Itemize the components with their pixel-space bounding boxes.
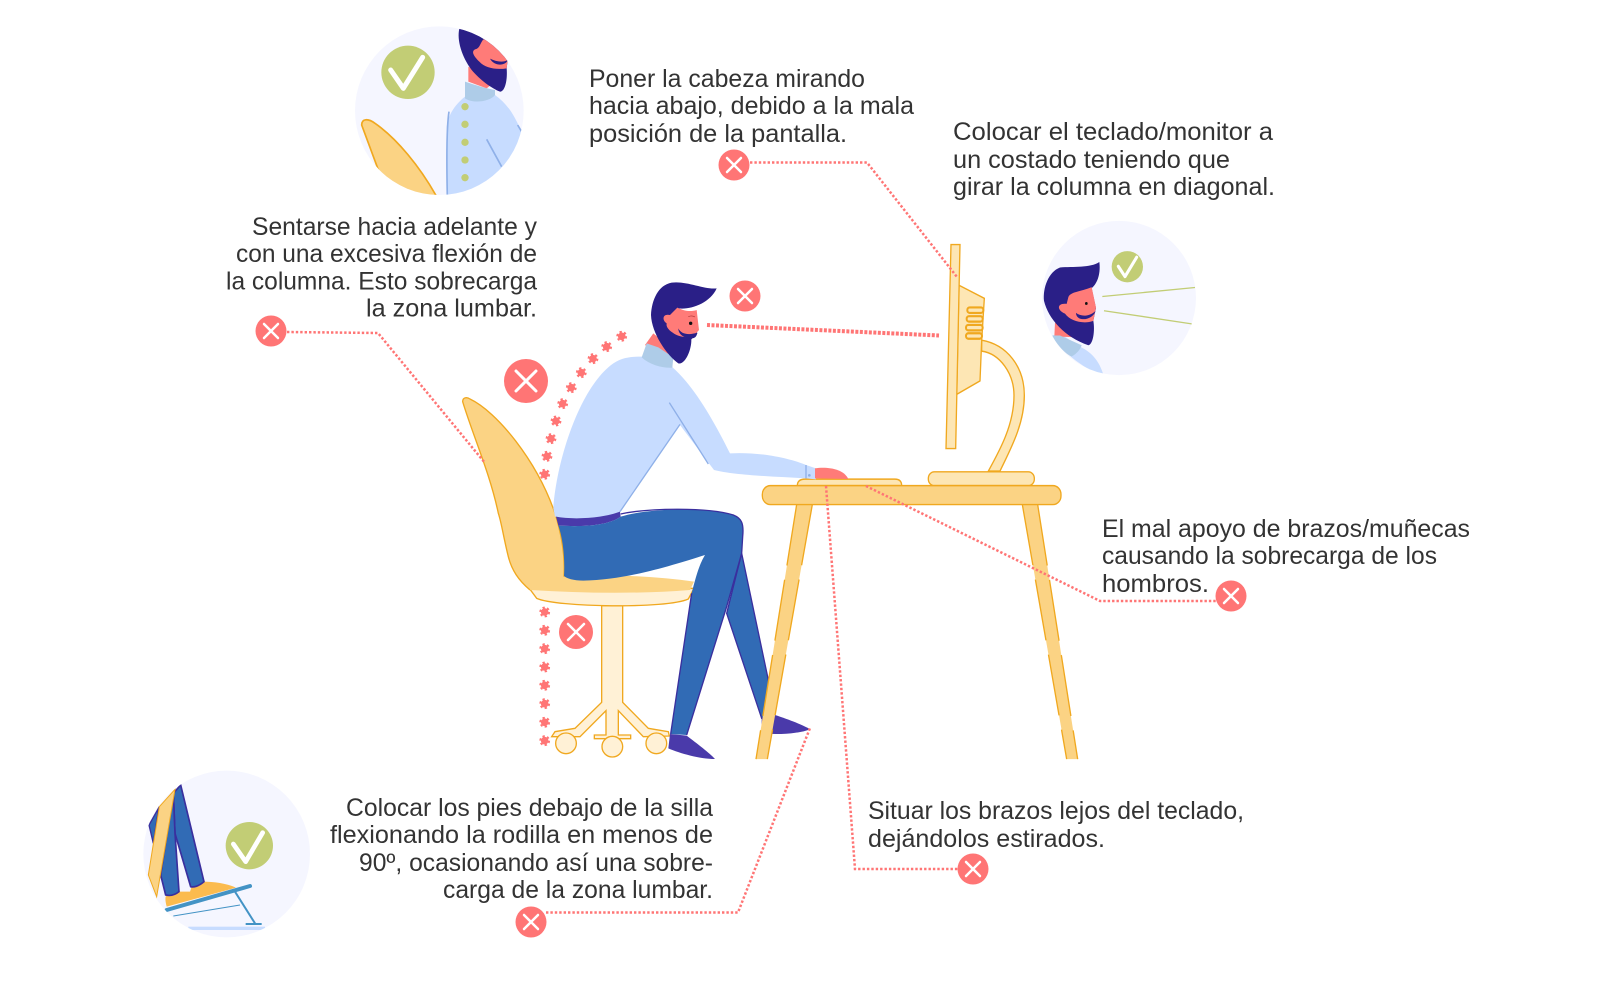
icon: green check [226, 822, 273, 869]
text: arm support: hombros. [1102, 570, 1209, 598]
leader: feet [546, 728, 810, 912]
icon: x head [718, 150, 750, 180]
infographic canvas [144, 26, 1469, 938]
monitor screen [946, 245, 960, 449]
eye [689, 322, 692, 325]
dotted curve: spine along back [540, 332, 626, 479]
illustration: table [756, 486, 1078, 759]
trousers [558, 510, 743, 735]
chair seat underside [530, 588, 694, 606]
callout: correct footrest [143, 771, 310, 937]
icon: x arms [958, 854, 988, 884]
illustration: seated man with chair [463, 357, 848, 759]
text: feet under chair: carga de la zona lumbar. [443, 876, 713, 904]
text: leaning forward: Sentarse hacia adelante y [252, 213, 537, 241]
text: leaning forward: con una excesiva flexión de [236, 240, 537, 268]
text: arm support [1102, 515, 1470, 598]
mouth [678, 328, 697, 338]
belt [556, 512, 621, 526]
front shoe [668, 734, 715, 759]
icon: green check [381, 46, 435, 99]
text: stretched arms: Situar los brazos lejos del teclado, [868, 797, 1244, 825]
text: arm support: El mal apoyo de brazos/muñecas [1102, 515, 1470, 543]
hand [815, 468, 848, 479]
circle background [143, 771, 310, 937]
text: feet under chair: 90º, ocasionando así una sobre- [359, 849, 713, 877]
monitor vents [966, 307, 983, 339]
icon: x back [504, 359, 548, 403]
circle background [355, 26, 524, 195]
text: leaning forward [226, 213, 537, 322]
text: keyboard to the side: un costado teniendo que [953, 146, 1230, 174]
leader: head down [750, 162, 957, 277]
torso and arm [553, 357, 816, 519]
leader: lumbar [287, 332, 485, 463]
illustration: desk and monitor [797, 245, 1034, 486]
monitor back [957, 285, 984, 394]
text: keyboard to the side: Colocar el teclado/monitor a [953, 118, 1273, 146]
chair seat and backrest [463, 398, 694, 593]
text: feet under chair: flexionando la rodilla en menos de [330, 821, 713, 849]
text: feet under chair: Colocar los pies debajo de la silla [346, 794, 713, 822]
callout: correct posture upright back [355, 26, 527, 197]
text: head looking down: hacia abajo, debido a la mala [589, 92, 914, 120]
text: arm support: causando la sobrecarga de los [1102, 542, 1437, 570]
callout: correct monitor height [1042, 221, 1196, 375]
text: leaning forward: la columna. Esto sobrecarga [226, 268, 537, 296]
leader: stretched arms [826, 486, 958, 869]
sight lines [1102, 287, 1195, 324]
keyboard [797, 479, 902, 486]
text: leaning forward: la zona lumbar. [366, 294, 537, 322]
arrow: line of sight to monitor [707, 325, 939, 336]
leader: arm support [866, 486, 1216, 601]
text: stretched arms: dejándolos estirados. [868, 825, 1105, 853]
dotted line: vertical below seat [540, 608, 549, 745]
chair base [552, 606, 669, 757]
neck [645, 333, 673, 357]
illustration: seated man's head [642, 282, 717, 368]
back shoe [762, 715, 810, 734]
text: head looking down [589, 65, 914, 148]
icon: x lumbar [256, 316, 286, 346]
text: stretched arms [868, 797, 1244, 853]
text: keyboard to the side [953, 118, 1275, 201]
icon: x feet [516, 906, 546, 938]
cropped legs and footrest [148, 785, 265, 930]
collar [642, 343, 673, 368]
icon: x shoulders [1216, 580, 1246, 612]
icon: x seat [559, 615, 593, 649]
icon: green check [1112, 251, 1143, 282]
text: feet under chair [330, 794, 713, 904]
table top [762, 486, 1061, 505]
table legs [756, 505, 1078, 759]
text: keyboard to the side: girar la columna en diagonal. [953, 173, 1275, 201]
text: head looking down: Poner la cabeza mirando [589, 65, 865, 93]
cropped figure [362, 29, 527, 197]
monitor stand arm [982, 340, 1024, 471]
hair and beard [651, 282, 717, 363]
cropped head [1044, 262, 1103, 375]
monitor base [928, 472, 1034, 486]
face [664, 308, 699, 337]
circle background [1042, 221, 1196, 375]
text: head looking down: posición de la pantalla. [589, 120, 847, 148]
icon: x gaze [730, 280, 760, 312]
back leg [727, 553, 775, 718]
